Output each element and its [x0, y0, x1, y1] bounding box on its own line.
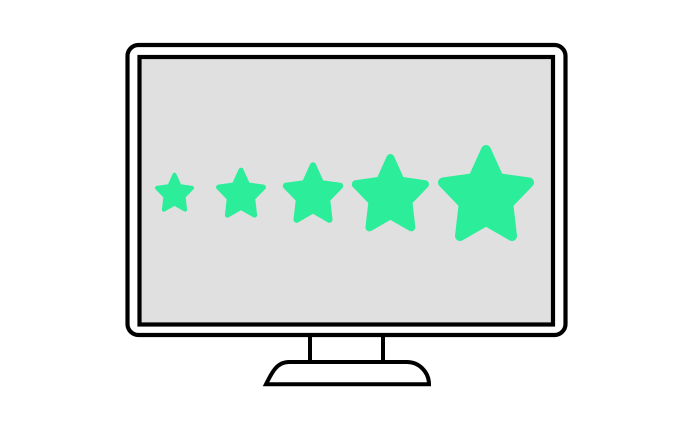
- monitor stand neck: [310, 335, 383, 362]
- star 5: [443, 150, 529, 236]
- star 4: [356, 158, 425, 227]
- monitor screen: [140, 57, 553, 324]
- monitor stand base: [266, 362, 429, 384]
- monitor outer frame: [128, 45, 566, 335]
- star 2: [219, 170, 263, 215]
- star rating row: [157, 150, 529, 236]
- star 1: [157, 175, 192, 210]
- star 3: [286, 165, 340, 220]
